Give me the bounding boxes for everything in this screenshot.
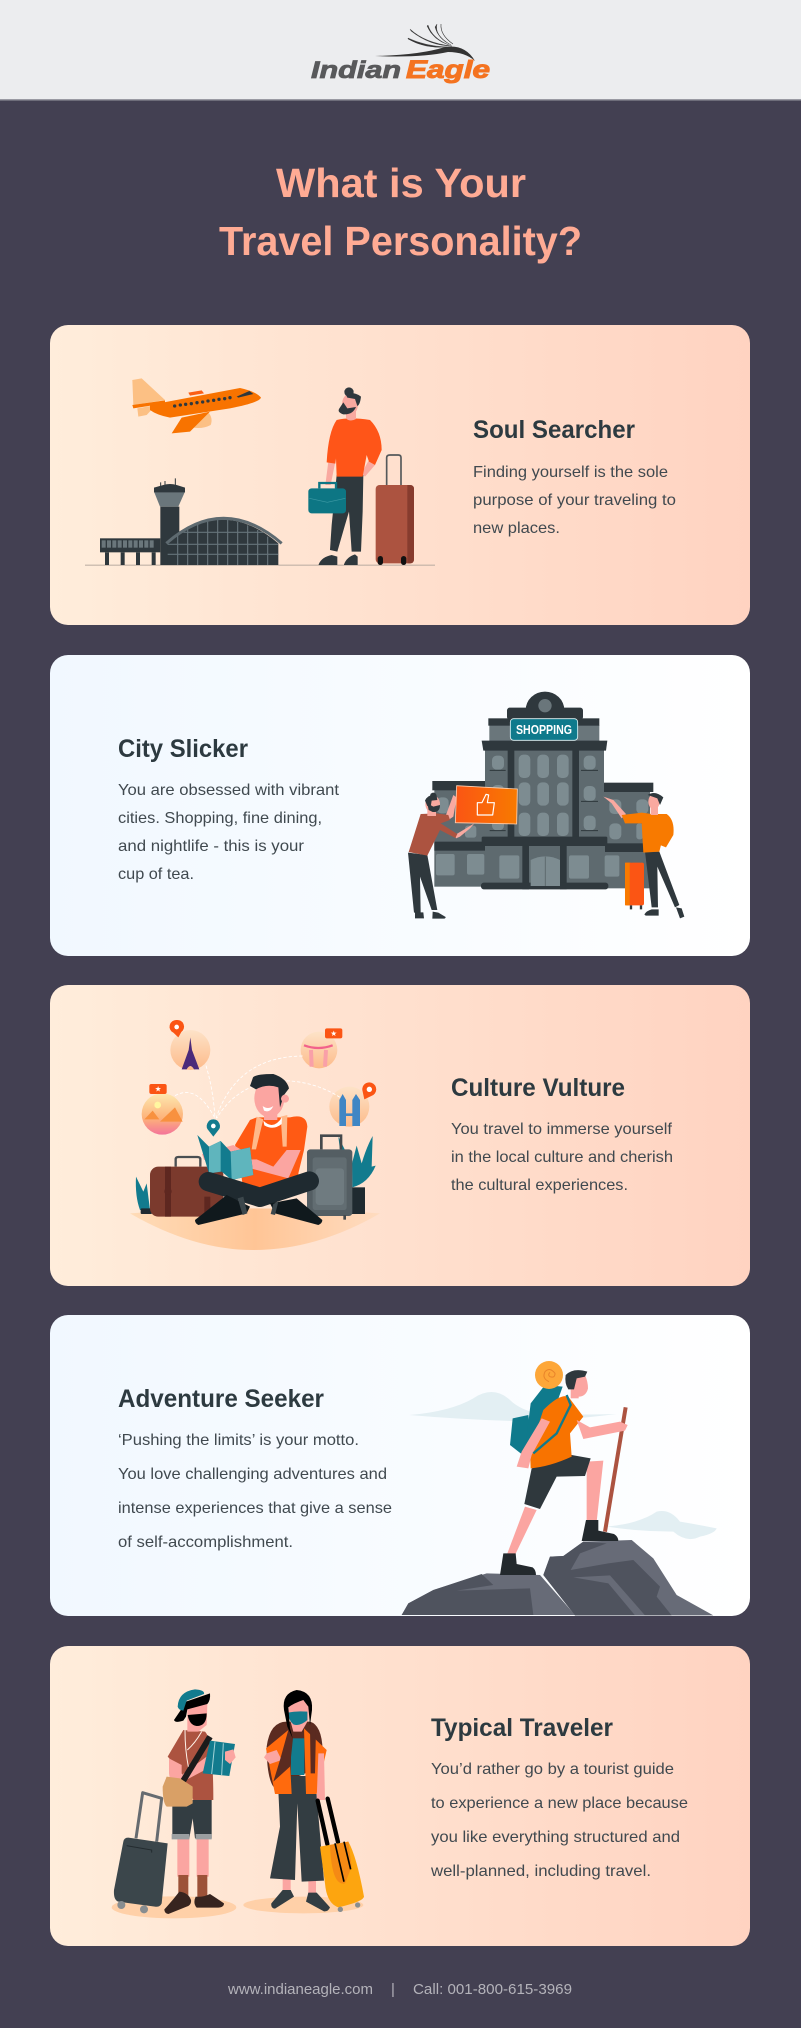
header band with logo (0, 0, 801, 100)
destination: desert pyramids bubble: ★ (155, 1085, 161, 1094)
text block: Culture Vulture description: the cultural experiences. (451, 1177, 628, 1194)
title: Travel Personality? (219, 218, 582, 264)
icon: airport terminal and control tower (100, 478, 282, 565)
illustration: reading traveler with destination bubbles (130, 1020, 380, 1250)
heading: City Slicker: City Slicker (118, 735, 248, 763)
footer contact line (227, 1981, 572, 1998)
destination: desert pyramids bubble (142, 1084, 183, 1135)
icon: red suitcase (376, 455, 414, 565)
icon: grey suitcase (307, 1136, 352, 1220)
text block: Adventure Seeker description (118, 1432, 392, 1551)
heading: Culture Vulture: Culture Vulture (451, 1074, 625, 1102)
text block: Soul Searcher description: Finding yourself is the sole (473, 464, 668, 481)
panel: City Slicker (50, 655, 750, 956)
illustration: hiker on rocks (402, 1361, 717, 1615)
icon: yellow suitcase (320, 1842, 364, 1912)
destination: Eiffel Tower bubble (170, 1020, 210, 1070)
text block: Typical Traveler description: You’d rather go by a tourist guide (431, 1761, 674, 1778)
panel: Culture Vulture (50, 985, 750, 1286)
panel: Adventure Seeker (50, 1315, 750, 1616)
dashed connectors (175, 1056, 340, 1118)
text block: Typical Traveler description: you like everything structured and (431, 1829, 680, 1846)
illustration: two masked travelers with luggage (112, 1689, 364, 1918)
figure: seated man (195, 1074, 322, 1225)
text block: Culture Vulture description (451, 1121, 673, 1194)
icon: shopping building (432, 692, 653, 889)
heading: Adventure Seeker: Adventure Seeker (118, 1385, 324, 1413)
text block: Soul Searcher description: new places. (473, 520, 560, 537)
illustration: airport, plane and traveler (85, 378, 435, 566)
text block: Typical Traveler description: well-planned, including travel. (430, 1863, 651, 1880)
clouds (409, 1392, 717, 1539)
icon: brown suitcase (150, 1157, 223, 1217)
sign: SHOPPING (510, 719, 578, 740)
icon: map pin (207, 1119, 220, 1137)
footer contact line: www.indianeagle.com (227, 1981, 373, 1998)
text block: Adventure Seeker description: ‘Pushing the limits’ is your motto. (118, 1432, 359, 1449)
rocks (402, 1540, 713, 1615)
ground shadows (112, 1896, 363, 1918)
icon: dark roller suitcase (114, 1793, 168, 1913)
heading: Typical Traveler: Typical Traveler (431, 1714, 613, 1742)
text block: City Slicker description: You are obsessed with vibrant (118, 782, 340, 799)
text block: City Slicker description: cup of tea. (118, 866, 194, 883)
text block: Adventure Seeker description: You love challenging adventures and (118, 1466, 387, 1483)
text block: Soul Searcher description: purpose of your traveling to (473, 492, 676, 509)
text block: City Slicker description: cities. Shopping, fine dining, (118, 810, 322, 827)
text block: Typical Traveler description: to experience a new place because (431, 1795, 688, 1812)
ground shape (130, 1208, 380, 1250)
panel: Soul Searcher (50, 325, 750, 625)
figure: man pointing with suitcase (603, 793, 684, 918)
text block: City Slicker description (118, 782, 340, 883)
title: What is Your (276, 160, 526, 206)
icon: bearded traveler (308, 387, 382, 565)
icon: plants (136, 1136, 376, 1214)
icon: airplane (132, 378, 261, 433)
footer contact line: Call: 001-800-615-3969 (413, 1981, 572, 1998)
panel: Typical Traveler (50, 1646, 750, 1946)
icon: walking stick (605, 1407, 626, 1532)
footer contact line: | (391, 1981, 395, 1998)
text block: Adventure Seeker description: intense experiences that give a sense (118, 1500, 392, 1517)
figure: man with map and cap (163, 1689, 236, 1914)
text block: Culture Vulture description: in the local culture and cherish (451, 1149, 673, 1166)
figure: woman in mask with backpack (264, 1690, 338, 1911)
sign: SHOPPING: SHOPPING (516, 723, 572, 737)
logo: Indian Eagle: Indian (311, 57, 401, 84)
text block: City Slicker description: and nightlife - this is your (118, 838, 305, 855)
text block: Typical Traveler description (430, 1761, 688, 1880)
destination: torii gate bubble: ★ (330, 1029, 337, 1038)
figure: hiker (500, 1361, 628, 1575)
text block: Soul Searcher description (473, 464, 676, 537)
destination: twin towers bubble (329, 1082, 376, 1127)
logo: Indian Eagle (311, 24, 490, 84)
icon: thumbs-up card (455, 786, 517, 824)
logo: Indian Eagle: Eagle (406, 56, 490, 84)
destination: torii gate bubble (301, 1028, 342, 1068)
text block: Culture Vulture description: You travel to immerse yourself (451, 1121, 673, 1138)
heading: Soul Searcher: Soul Searcher (473, 416, 635, 444)
title (219, 160, 582, 264)
text block: Adventure Seeker description: of self-accomplishment. (118, 1534, 293, 1551)
illustration: shopping building with two people (408, 692, 684, 919)
figure: man holding thumbs-up sign (408, 793, 474, 919)
